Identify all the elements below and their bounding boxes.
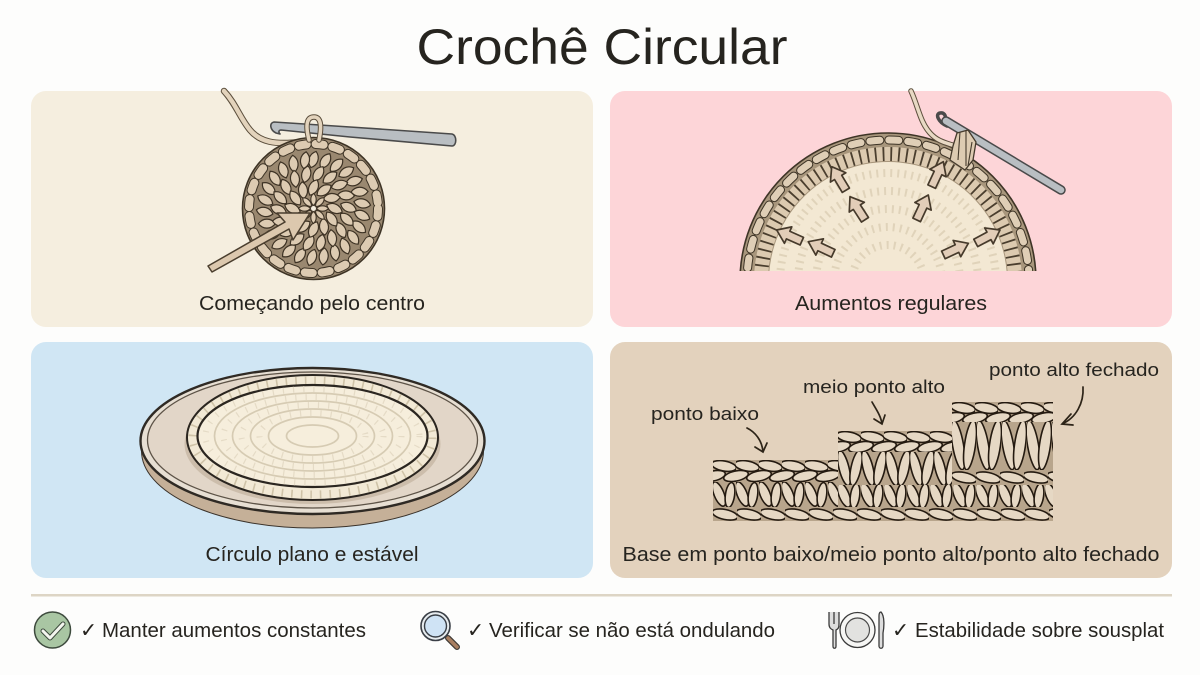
caption: Base em ponto baixo/meio ponto alto/ponto alto fechado: [622, 544, 1160, 566]
icon: yarn loop on hook: [307, 117, 321, 140]
arrow: ponto alto fechado: [1062, 387, 1083, 425]
crochet disc: [242, 138, 384, 280]
panel: tipos de ponto: [610, 342, 1172, 578]
panel: aumentos regulares: [610, 88, 1172, 327]
icon: crochet thread: [224, 91, 300, 143]
arrow: meio ponto alto: [872, 402, 885, 424]
icon: thread highlight: [911, 91, 955, 146]
title: Crochê Circular: [416, 19, 788, 75]
tip text: ✓: [80, 619, 97, 642]
tip text: ✓: [467, 619, 484, 642]
panel: começando pelo centro: [31, 91, 593, 327]
icon: plate and cutlery: [829, 612, 884, 648]
half crochet disc: [740, 132, 1036, 271]
caption: Começando pelo centro: [199, 293, 425, 315]
tip text: Estabilidade sobre sousplat: [915, 619, 1164, 642]
tip text: Manter aumentos constantes: [102, 619, 366, 642]
tip: verificar: [421, 612, 775, 647]
plate: [140, 368, 484, 528]
arrows: increases: [773, 158, 1004, 263]
icon: crochet thread highlight: [224, 91, 300, 143]
icon: magnifier: [421, 612, 457, 647]
icon: check badge: [34, 612, 70, 648]
label: ponto alto fechado: ponto alto fechado: [989, 359, 1159, 380]
tip text: Verificar se não está ondulando: [489, 619, 775, 642]
label: meio ponto alto: meio ponto alto: [803, 376, 945, 397]
caption: Círculo plano e estável: [206, 544, 418, 566]
caption: Aumentos regulares: [795, 293, 987, 315]
icon: crochet hook: [271, 122, 456, 146]
arrow: ponto baixo: [747, 428, 767, 452]
tip: manter aumentos: [34, 612, 366, 648]
crochet mat: [187, 375, 438, 500]
tip text: ✓: [892, 619, 909, 642]
icon: thread: [911, 91, 955, 146]
icon: hook: [938, 113, 1061, 190]
stitch sample: [713, 402, 1053, 521]
arrow: pointing to centre: [208, 213, 310, 272]
panel: círculo plano e estável: [31, 342, 593, 578]
icon: yarn loop outline: [307, 117, 321, 140]
label: ponto baixo: ponto baixo: [651, 403, 759, 424]
tip: estabilidade: [829, 612, 1164, 648]
icon: stitch on hook: [950, 130, 976, 170]
